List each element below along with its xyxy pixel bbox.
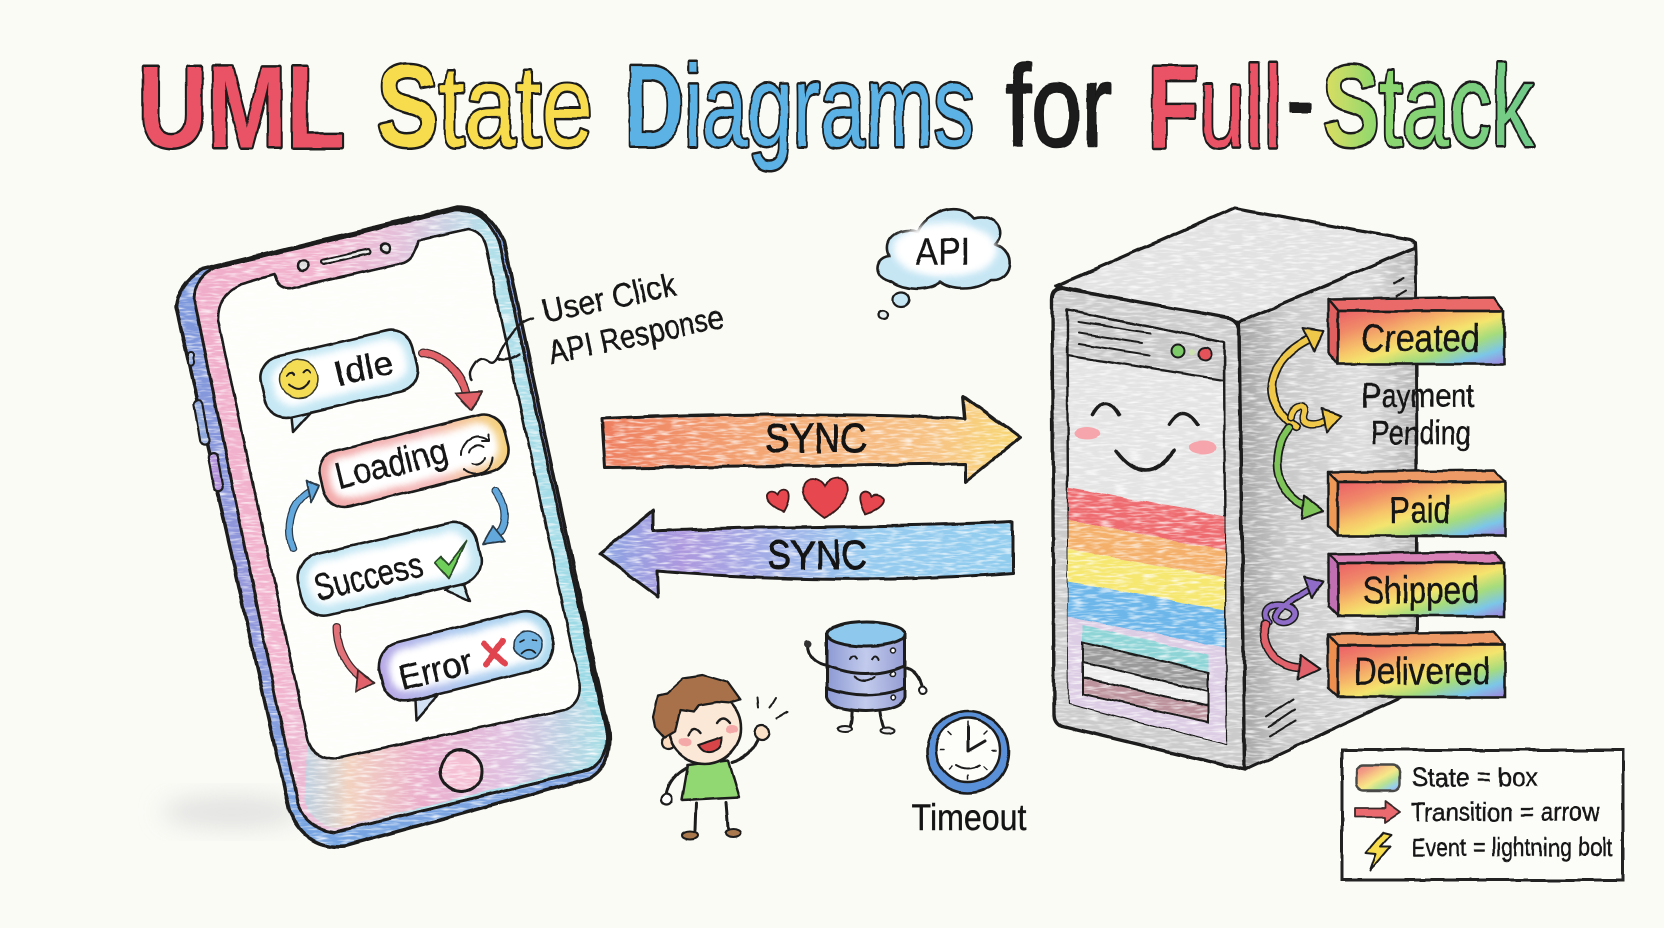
lower panel tint (1068, 617, 1226, 744)
thought bubbles (878, 292, 910, 320)
label: Payment Pending: Payment (1362, 377, 1474, 414)
server vents and lights (1079, 278, 1406, 736)
server front face (1052, 288, 1245, 770)
arrow: loading to success (483, 490, 505, 544)
child ear (662, 736, 676, 750)
legend (1342, 750, 1623, 880)
server smiling face (1074, 404, 1217, 470)
title: Stack (1323, 41, 1535, 171)
sync arrow: server to client: SYNC (767, 532, 867, 578)
phone (176, 207, 609, 846)
state bubble: Success: Success (310, 544, 426, 609)
arrow: idle to loading (423, 353, 483, 410)
state box: Delivered (1328, 632, 1505, 697)
home button (440, 750, 482, 792)
label: Payment Pending (1362, 377, 1474, 451)
database arms and legs (808, 646, 922, 729)
state box: Delivered: Delivered (1354, 651, 1490, 693)
state box: Created: Created (1360, 318, 1480, 360)
database face (850, 656, 878, 681)
icon: sad face (514, 631, 542, 659)
server front panel (1067, 310, 1226, 744)
title: for (1006, 41, 1112, 171)
icon: loading spinner (461, 434, 493, 474)
sync arrow: server to client (600, 511, 1013, 597)
state bubble: Idle (256, 326, 422, 432)
order transition arrows on server side (1264, 328, 1341, 679)
drive bays (1083, 625, 1208, 722)
state bubble: Success (292, 518, 486, 620)
child limbs (667, 738, 758, 830)
hearts (767, 479, 884, 518)
state box: Created (1328, 297, 1504, 364)
legend swatch: transition arrow (1355, 801, 1400, 822)
state bubble: Loading (315, 410, 513, 512)
child face (688, 718, 730, 735)
API thought cloud: API (916, 231, 970, 272)
state box: Paid: Paid (1390, 490, 1450, 532)
child shirt (682, 760, 739, 800)
icon: smiley (280, 360, 318, 398)
legend label: state: State = box (1411, 762, 1538, 792)
arrow: to Shipped (1265, 577, 1323, 623)
title: Full (1148, 42, 1282, 172)
phone back edge (176, 207, 609, 846)
character: database (804, 622, 926, 734)
state box: Paid (1328, 470, 1505, 536)
arrow: to Created (1272, 328, 1323, 427)
legend swatch: state box (1356, 765, 1400, 791)
legend swatch: lightning bolt (1365, 832, 1391, 871)
icon: check mark (435, 541, 467, 578)
child head (669, 692, 741, 764)
title: State (377, 41, 593, 171)
phone front bezel (194, 210, 607, 832)
legend label: event: Event = lightning bolt (1411, 832, 1614, 862)
database body (827, 634, 905, 711)
arrow: to Delivered (1264, 624, 1320, 679)
label: Payment Pending: Pending (1371, 414, 1471, 451)
state box: Shipped (1328, 552, 1505, 616)
label: Timeout: Timeout (912, 797, 1027, 838)
state bubble: Idle: Idle (330, 341, 398, 394)
speaker and camera (298, 244, 390, 272)
event labels: User Click and API Response (539, 265, 727, 371)
sync arrow: client to server (602, 396, 1020, 482)
state box: Shipped: Shipped (1364, 570, 1478, 612)
wave motion lines (757, 698, 788, 718)
icon: clock (927, 711, 1009, 793)
legend label: transition: Transition = arrow (1411, 797, 1599, 827)
server top face (1056, 208, 1415, 322)
title: - (1286, 44, 1314, 156)
transition arrows inside phone (289, 318, 534, 692)
arrow: success to error (337, 627, 374, 692)
icon: red cross (484, 640, 505, 665)
event callout squiggle (470, 318, 534, 380)
state bubble: Error: Error (394, 641, 476, 698)
arrow: to Payment Pending (1291, 406, 1341, 433)
sync arrow: client to server: SYNC (765, 415, 867, 461)
server side face (1239, 243, 1417, 770)
title (138, 41, 1535, 172)
rainbow stripes (1068, 487, 1225, 648)
title: UML (138, 42, 345, 172)
phone shadow (160, 794, 304, 830)
child hair (653, 675, 740, 738)
server top bar (1067, 310, 1224, 380)
phone screen (218, 229, 580, 758)
arrow: success to loading (289, 480, 319, 549)
state bubble: Loading: Loading (331, 430, 451, 497)
phone chin colour (304, 695, 603, 828)
side buttons (188, 352, 223, 492)
arrow: to Paid (1277, 428, 1323, 519)
API thought cloud (877, 209, 1010, 320)
event labels: User Click and API Response: User Click (539, 265, 680, 330)
state bubble: Error (373, 606, 559, 720)
title: Diagrams (625, 41, 974, 171)
event labels: User Click and API Response: API Response (545, 298, 727, 371)
server tower (1052, 208, 1417, 770)
character: waving child (653, 675, 788, 839)
